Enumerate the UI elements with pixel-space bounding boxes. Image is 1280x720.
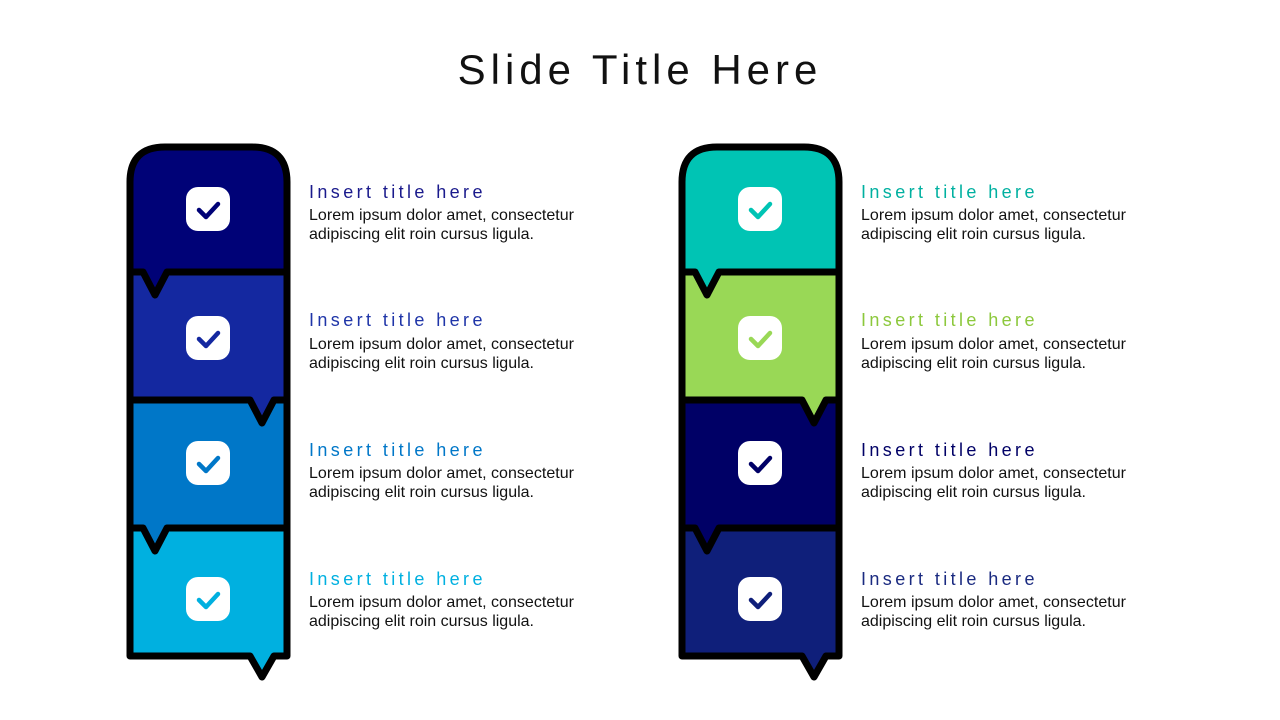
text block: right 1: Insert title here [861, 182, 1038, 202]
text block: left 4: adipiscing elit roin cursus ligula. [309, 613, 534, 630]
text block: right 3: adipiscing elit roin cursus ligula. [861, 484, 1086, 501]
icon: check 8 [738, 577, 782, 621]
text block: left 1 [309, 182, 575, 243]
text block: left 2 [309, 310, 575, 372]
text block: left 2: Insert title here [309, 310, 486, 330]
text block: right 4: Lorem ipsum dolor amet, consectetur [861, 594, 1127, 611]
text block: right 1 [861, 182, 1127, 243]
text block: right 3: Insert title here [861, 440, 1038, 460]
panel: left column [130, 147, 287, 677]
text block: left 3 [309, 440, 575, 501]
text block: left 2: Lorem ipsum dolor amet, consectetur [309, 336, 575, 353]
text block: right 4: adipiscing elit roin cursus ligula. [861, 613, 1086, 630]
text block: left 4 [309, 569, 575, 630]
panel: right column [682, 147, 839, 677]
text block: right 3 [861, 440, 1127, 501]
icon: check 6 [738, 316, 782, 360]
text block: left 2: adipiscing elit roin cursus ligula. [309, 355, 534, 372]
title: Slide Title Here [458, 46, 822, 93]
text block: right 3: Lorem ipsum dolor amet, consectetur [861, 465, 1127, 482]
icon: check 7 [738, 441, 782, 485]
icon: check 3 [186, 441, 230, 485]
text block: right 4: Insert title here [861, 569, 1038, 589]
text block: right 1: Lorem ipsum dolor amet, consectetur [861, 207, 1127, 224]
text block: right 2: Lorem ipsum dolor amet, consectetur [861, 336, 1127, 353]
text block: right 4 [861, 569, 1127, 630]
text block: right 2: adipiscing elit roin cursus ligula. [861, 355, 1086, 372]
text block: left 1: adipiscing elit roin cursus ligula. [309, 226, 534, 243]
text block: right 1: adipiscing elit roin cursus ligula. [861, 226, 1086, 243]
text block: left 1: Insert title here [309, 182, 486, 202]
text block: left 3: adipiscing elit roin cursus ligula. [309, 484, 534, 501]
text block: left 3: Lorem ipsum dolor amet, consectetur [309, 465, 575, 482]
text block: left 3: Insert title here [309, 440, 486, 460]
icon: check 5 [738, 187, 782, 231]
icon: check 4 [186, 577, 230, 621]
text block: left 4: Lorem ipsum dolor amet, consectetur [309, 594, 575, 611]
icon: check 2 [186, 316, 230, 360]
text block: left 4: Insert title here [309, 569, 486, 589]
text block: right 2 [861, 310, 1127, 372]
text block: right 2: Insert title here [861, 310, 1038, 330]
icon: check 1 [186, 187, 230, 231]
text block: left 1: Lorem ipsum dolor amet, consectetur [309, 207, 575, 224]
